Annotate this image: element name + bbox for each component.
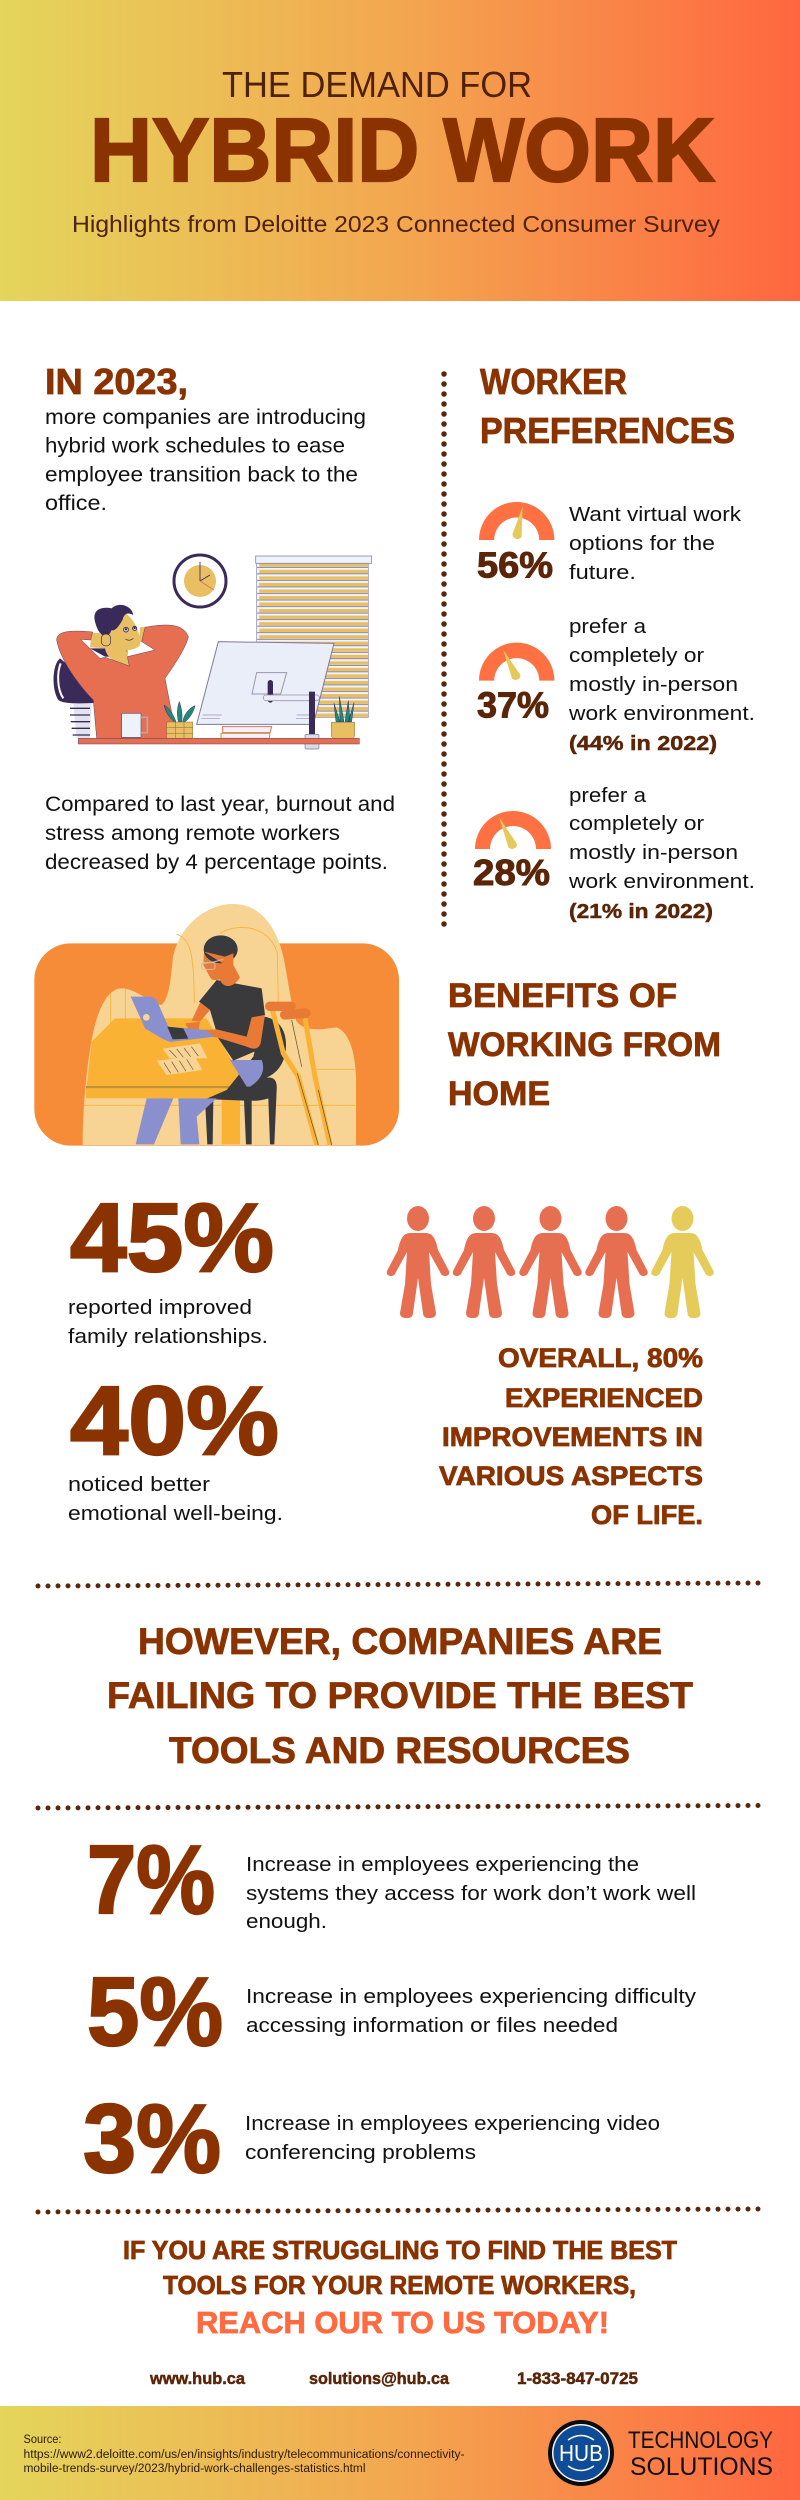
- stat: 45 percent: reported improved: [68, 1297, 252, 1319]
- text block: intro: hybrid work schedules to ease: [45, 435, 345, 458]
- heading: worker preferences: PREFERENCES: [480, 410, 735, 451]
- icon: computer monitor: [197, 642, 334, 749]
- icon: plant on the right: [331, 697, 355, 739]
- icon: man: [57, 605, 188, 738]
- panel: orange backdrop: [34, 943, 399, 1146]
- stat: 45 percent: [68, 1183, 274, 1348]
- callout: call to action: [123, 2235, 677, 2340]
- source citation: mobile-trends-survey/2023/hybrid-work-challenges-statistics.html: [24, 2463, 366, 2475]
- stat: 28 percent gauge: mostly in-person: [569, 842, 738, 864]
- heading: however companies are failing: [107, 1621, 693, 1771]
- title: hybrid work: HYBRID WORK: [90, 101, 715, 201]
- subtitle: Highlights from Deloitte 2023 Connected Consumer Survey: [72, 211, 721, 237]
- divider: dotted line: [38, 2209, 760, 2212]
- logo: hub technology solutions: [548, 2420, 773, 2486]
- icon: person 2: [453, 1206, 515, 1318]
- heading: benefits of working from home: BENEFITS OF: [448, 977, 677, 1015]
- callout: call to action: TOOLS FOR YOUR REMOTE WORKERS,: [163, 2270, 636, 2300]
- stat: 28 percent gauge: [473, 785, 755, 923]
- icon: head and arms: [185, 935, 265, 1049]
- stat: 5 percent: Increase in employees experiencing difficulty: [246, 1986, 696, 2008]
- source citation: [24, 2434, 465, 2475]
- stat: 3 percent: Increase in employees experiencing video: [245, 2113, 660, 2135]
- text block: intro: employee transition back to the: [45, 464, 358, 486]
- stat: 37 percent gauge: 37%: [477, 684, 549, 726]
- icon: wall clock: [174, 555, 226, 607]
- callout: call to action: IF YOU ARE STRUGGLING TO FIND THE BEST: [123, 2235, 677, 2265]
- stat: 37 percent gauge: prefer a: [569, 616, 647, 638]
- divider: vertical dotted line: [441, 374, 447, 926]
- stat: 56 percent gauge: future.: [569, 562, 636, 584]
- stat: 7 percent: Increase in employees experiencing the: [246, 1854, 639, 1876]
- source citation: Source:: [24, 2434, 62, 2446]
- stat: 3 percent: conferencing problems: [245, 2142, 476, 2164]
- source citation: https://www2.deloitte.com/us/en/insights/industry/telecommunications/connectivity-: [24, 2449, 465, 2461]
- icon: desk: [86, 1018, 247, 1144]
- text block: overall 80 percent: [439, 1343, 703, 1530]
- stat: 7 percent: systems they access for work don’t work well: [246, 1883, 696, 1905]
- text block: overall 80 percent: OVERALL, 80%: [498, 1343, 703, 1373]
- icon: crutches: [265, 1002, 332, 1145]
- icon: person 1: [387, 1206, 449, 1318]
- text block: overall 80 percent: EXPERIENCED: [505, 1383, 703, 1413]
- stat: 56 percent gauge: 56%: [477, 544, 553, 586]
- icon: person 3: [519, 1206, 582, 1318]
- callout: call to action: REACH OUR TO US TODAY!: [196, 2305, 609, 2340]
- stat: 37 percent gauge: work environment.: [568, 703, 755, 725]
- stat: 3 percent: 3%: [83, 2084, 221, 2193]
- contact details: 1-833-847-0725: [517, 2369, 638, 2388]
- icon: trousers: [136, 1060, 263, 1144]
- illustration: man relaxing at desk: [54, 555, 372, 749]
- illustration: person working on a laptop: [34, 904, 399, 1146]
- text block: intro: [45, 406, 366, 515]
- text block: burnout: decreased by 4 percentage points.: [45, 851, 388, 874]
- text block: intro: more companies are introducing: [45, 406, 366, 429]
- icon: laptop: [131, 997, 215, 1042]
- panel: pale room shape: [83, 904, 356, 1145]
- icon: person 4: [585, 1206, 648, 1318]
- stat: 37 percent gauge: (44% in 2022): [569, 733, 717, 755]
- stat: 37 percent gauge: [477, 616, 755, 755]
- text block: overall 80 percent: OF LIFE.: [591, 1500, 703, 1530]
- heading: however companies are failing: HOWEVER, COMPANIES ARE: [138, 1621, 662, 1662]
- stat: 5 percent: 5%: [87, 1957, 223, 2066]
- stat: 40 percent: [68, 1366, 283, 1525]
- stat: 37 percent gauge: completely or: [569, 645, 704, 667]
- stat: 40 percent: 40%: [70, 1366, 279, 1475]
- icon: gauge 37: [479, 643, 554, 681]
- text block: intro: office.: [45, 492, 107, 515]
- heading: however companies are failing: FAILING TO PROVIDE THE BEST: [107, 1675, 693, 1716]
- pictogram: five people, four of them highlighted: [387, 1206, 714, 1318]
- icon: plant on the left: [164, 702, 195, 739]
- stat: 56 percent gauge: [477, 502, 742, 586]
- stat: 5 percent: [87, 1957, 696, 2066]
- heading: in 2023: IN 2023,: [45, 361, 188, 402]
- text block: burnout: Compared to last year, burnout and: [45, 793, 395, 816]
- text block: overall 80 percent: VARIOUS ASPECTS: [439, 1461, 703, 1491]
- icon: gauge 56: [479, 502, 554, 540]
- stat: 45 percent: family relationships.: [68, 1326, 268, 1348]
- header banner: [0, 0, 800, 301]
- text block: burnout: stress among remote workers: [45, 822, 340, 845]
- stat: 28 percent gauge: (21% in 2022): [569, 901, 713, 923]
- stat: 7 percent: 7%: [87, 1825, 215, 1934]
- stat: 56 percent gauge: options for the: [569, 533, 715, 555]
- contact details: www.hub.ca: [149, 2369, 246, 2388]
- heading: worker preferences: [480, 361, 735, 451]
- icon: torso: [199, 980, 265, 1061]
- stat: 28 percent gauge: work environment.: [568, 871, 755, 893]
- icon: window blinds: [256, 556, 372, 717]
- icon: chair: [54, 658, 98, 738]
- heading: benefits of working from home: HOME: [448, 1075, 550, 1113]
- logo: hub technology solutions: SOLUTIONS: [630, 2453, 773, 2481]
- icon: desk: [78, 738, 359, 744]
- heading: benefits of working from home: [448, 977, 721, 1113]
- text block: overall 80 percent: IMPROVEMENTS IN: [442, 1422, 703, 1452]
- footer band: [0, 2406, 800, 2500]
- stat: 40 percent: noticed better: [68, 1474, 210, 1496]
- stat: 45 percent: 45%: [70, 1183, 274, 1292]
- stat: 56 percent gauge: Want virtual work: [569, 504, 742, 526]
- icon: papers: [157, 1043, 207, 1075]
- heading: however companies are failing: TOOLS AND RESOURCES: [169, 1730, 630, 1771]
- icon: person 5: [651, 1206, 714, 1318]
- logo: hub technology solutions: TECHNOLOGY: [628, 2427, 773, 2454]
- stat: 5 percent: accessing information or files needed: [246, 2015, 618, 2037]
- icon: chair: [205, 1017, 286, 1144]
- icon: gauge 28: [475, 811, 551, 849]
- heading: benefits of working from home: WORKING FROM: [448, 1026, 721, 1064]
- stat: 28 percent gauge: 28%: [473, 852, 550, 893]
- icon: books: [221, 727, 272, 738]
- heading: worker preferences: WORKER: [480, 361, 627, 402]
- stat: 7 percent: [87, 1825, 696, 1934]
- stat: 40 percent: emotional well-being.: [68, 1503, 283, 1525]
- contact details: [149, 2369, 638, 2388]
- stat: 28 percent gauge: prefer a: [569, 785, 647, 807]
- divider: dotted line: [38, 1583, 760, 1586]
- stat: 3 percent: [83, 2084, 660, 2193]
- stat: 28 percent gauge: completely or: [569, 813, 704, 835]
- icon: mug: [122, 713, 147, 737]
- logo: hub technology solutions: HUB: [559, 2440, 603, 2466]
- divider: dotted line: [38, 1806, 760, 1808]
- stat: 37 percent gauge: mostly in-person: [569, 674, 738, 696]
- stat: 7 percent: enough.: [246, 1911, 327, 1933]
- contact details: solutions@hub.ca: [309, 2369, 450, 2388]
- title line: the demand for: THE DEMAND FOR: [222, 64, 532, 105]
- text block: burnout: [45, 793, 395, 874]
